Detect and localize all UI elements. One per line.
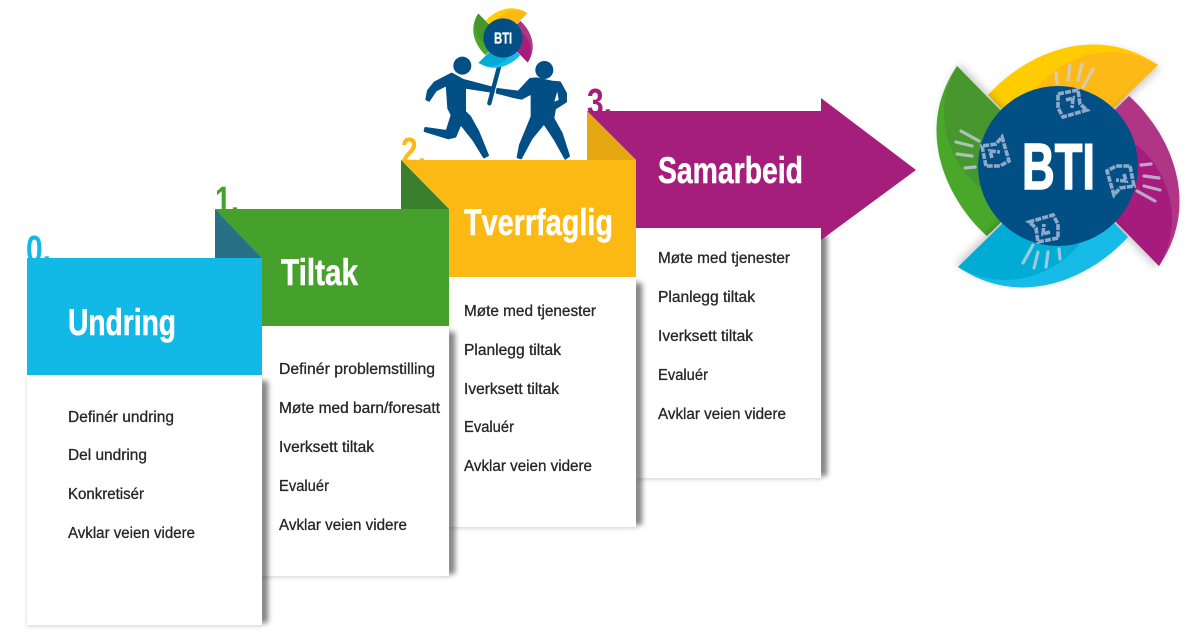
header [27, 258, 262, 375]
panel: step 1 Tiltak [215, 180, 455, 576]
text list card [636, 228, 827, 478]
text list card: Planlegg tiltak [658, 289, 755, 306]
header [401, 160, 636, 277]
fold [401, 160, 449, 209]
center circle [978, 86, 1138, 246]
text list card: Avklar veien videre [279, 517, 407, 534]
text list card: Iverksett tiltak [279, 439, 374, 456]
arrow header [587, 98, 916, 240]
text list card: Avklar veien videre [464, 458, 592, 475]
icon: small BTI logo [473, 8, 533, 68]
text list card: Iverksett tiltak [464, 381, 559, 398]
petal: purple [1058, 96, 1179, 266]
text list card: Planlegg tiltak [464, 342, 561, 359]
heading: Tverrfaglig [464, 202, 613, 243]
heading: Samarbeid [658, 150, 803, 191]
icon: two figures passing a BTI baton [425, 57, 569, 159]
text list card [449, 277, 642, 527]
logo text: BTI [1022, 130, 1095, 203]
fold [215, 209, 262, 258]
text list card: Møte med barn/foresatt [279, 400, 441, 417]
panel: step 0 Undring [26, 229, 268, 625]
heading: Tiltak [281, 252, 358, 293]
handprints [956, 64, 1160, 268]
text list card: Definér problemstilling [279, 361, 435, 378]
heading: Undring [68, 302, 176, 343]
petal: green [937, 66, 1058, 236]
step number 2: 2. [401, 131, 426, 173]
text list card: Evaluér [658, 367, 708, 384]
header [215, 209, 449, 326]
icon: large BTI logo [937, 45, 1179, 287]
text list card: Evaluér [279, 478, 329, 495]
step number 0: 0. [26, 229, 51, 271]
panel: step 2 Tverrfaglig [401, 131, 642, 527]
step number 1: 1. [215, 180, 239, 222]
text list card: Evaluér [464, 419, 514, 436]
text list card: Iverksett tiltak [658, 328, 753, 345]
text list card: Avklar veien videre [658, 406, 786, 423]
step number 3: 3. [587, 82, 612, 124]
text list card: Møte med tjenester [464, 303, 596, 320]
fold [587, 111, 636, 160]
text list card: Del undring [68, 447, 147, 464]
text list card: Definér undring [68, 409, 174, 426]
icon: small BTI logo: BTI [494, 31, 512, 48]
text list card: Avklar veien videre [68, 525, 195, 542]
petal: cyan [958, 166, 1128, 287]
panel: step 3 Samarbeid [587, 82, 916, 478]
text list card: Konkretisér [68, 486, 144, 503]
text list card: Møte med tjenester [658, 250, 790, 267]
petal: yellow [988, 45, 1158, 166]
text list card [262, 326, 455, 576]
text list card [27, 375, 268, 625]
